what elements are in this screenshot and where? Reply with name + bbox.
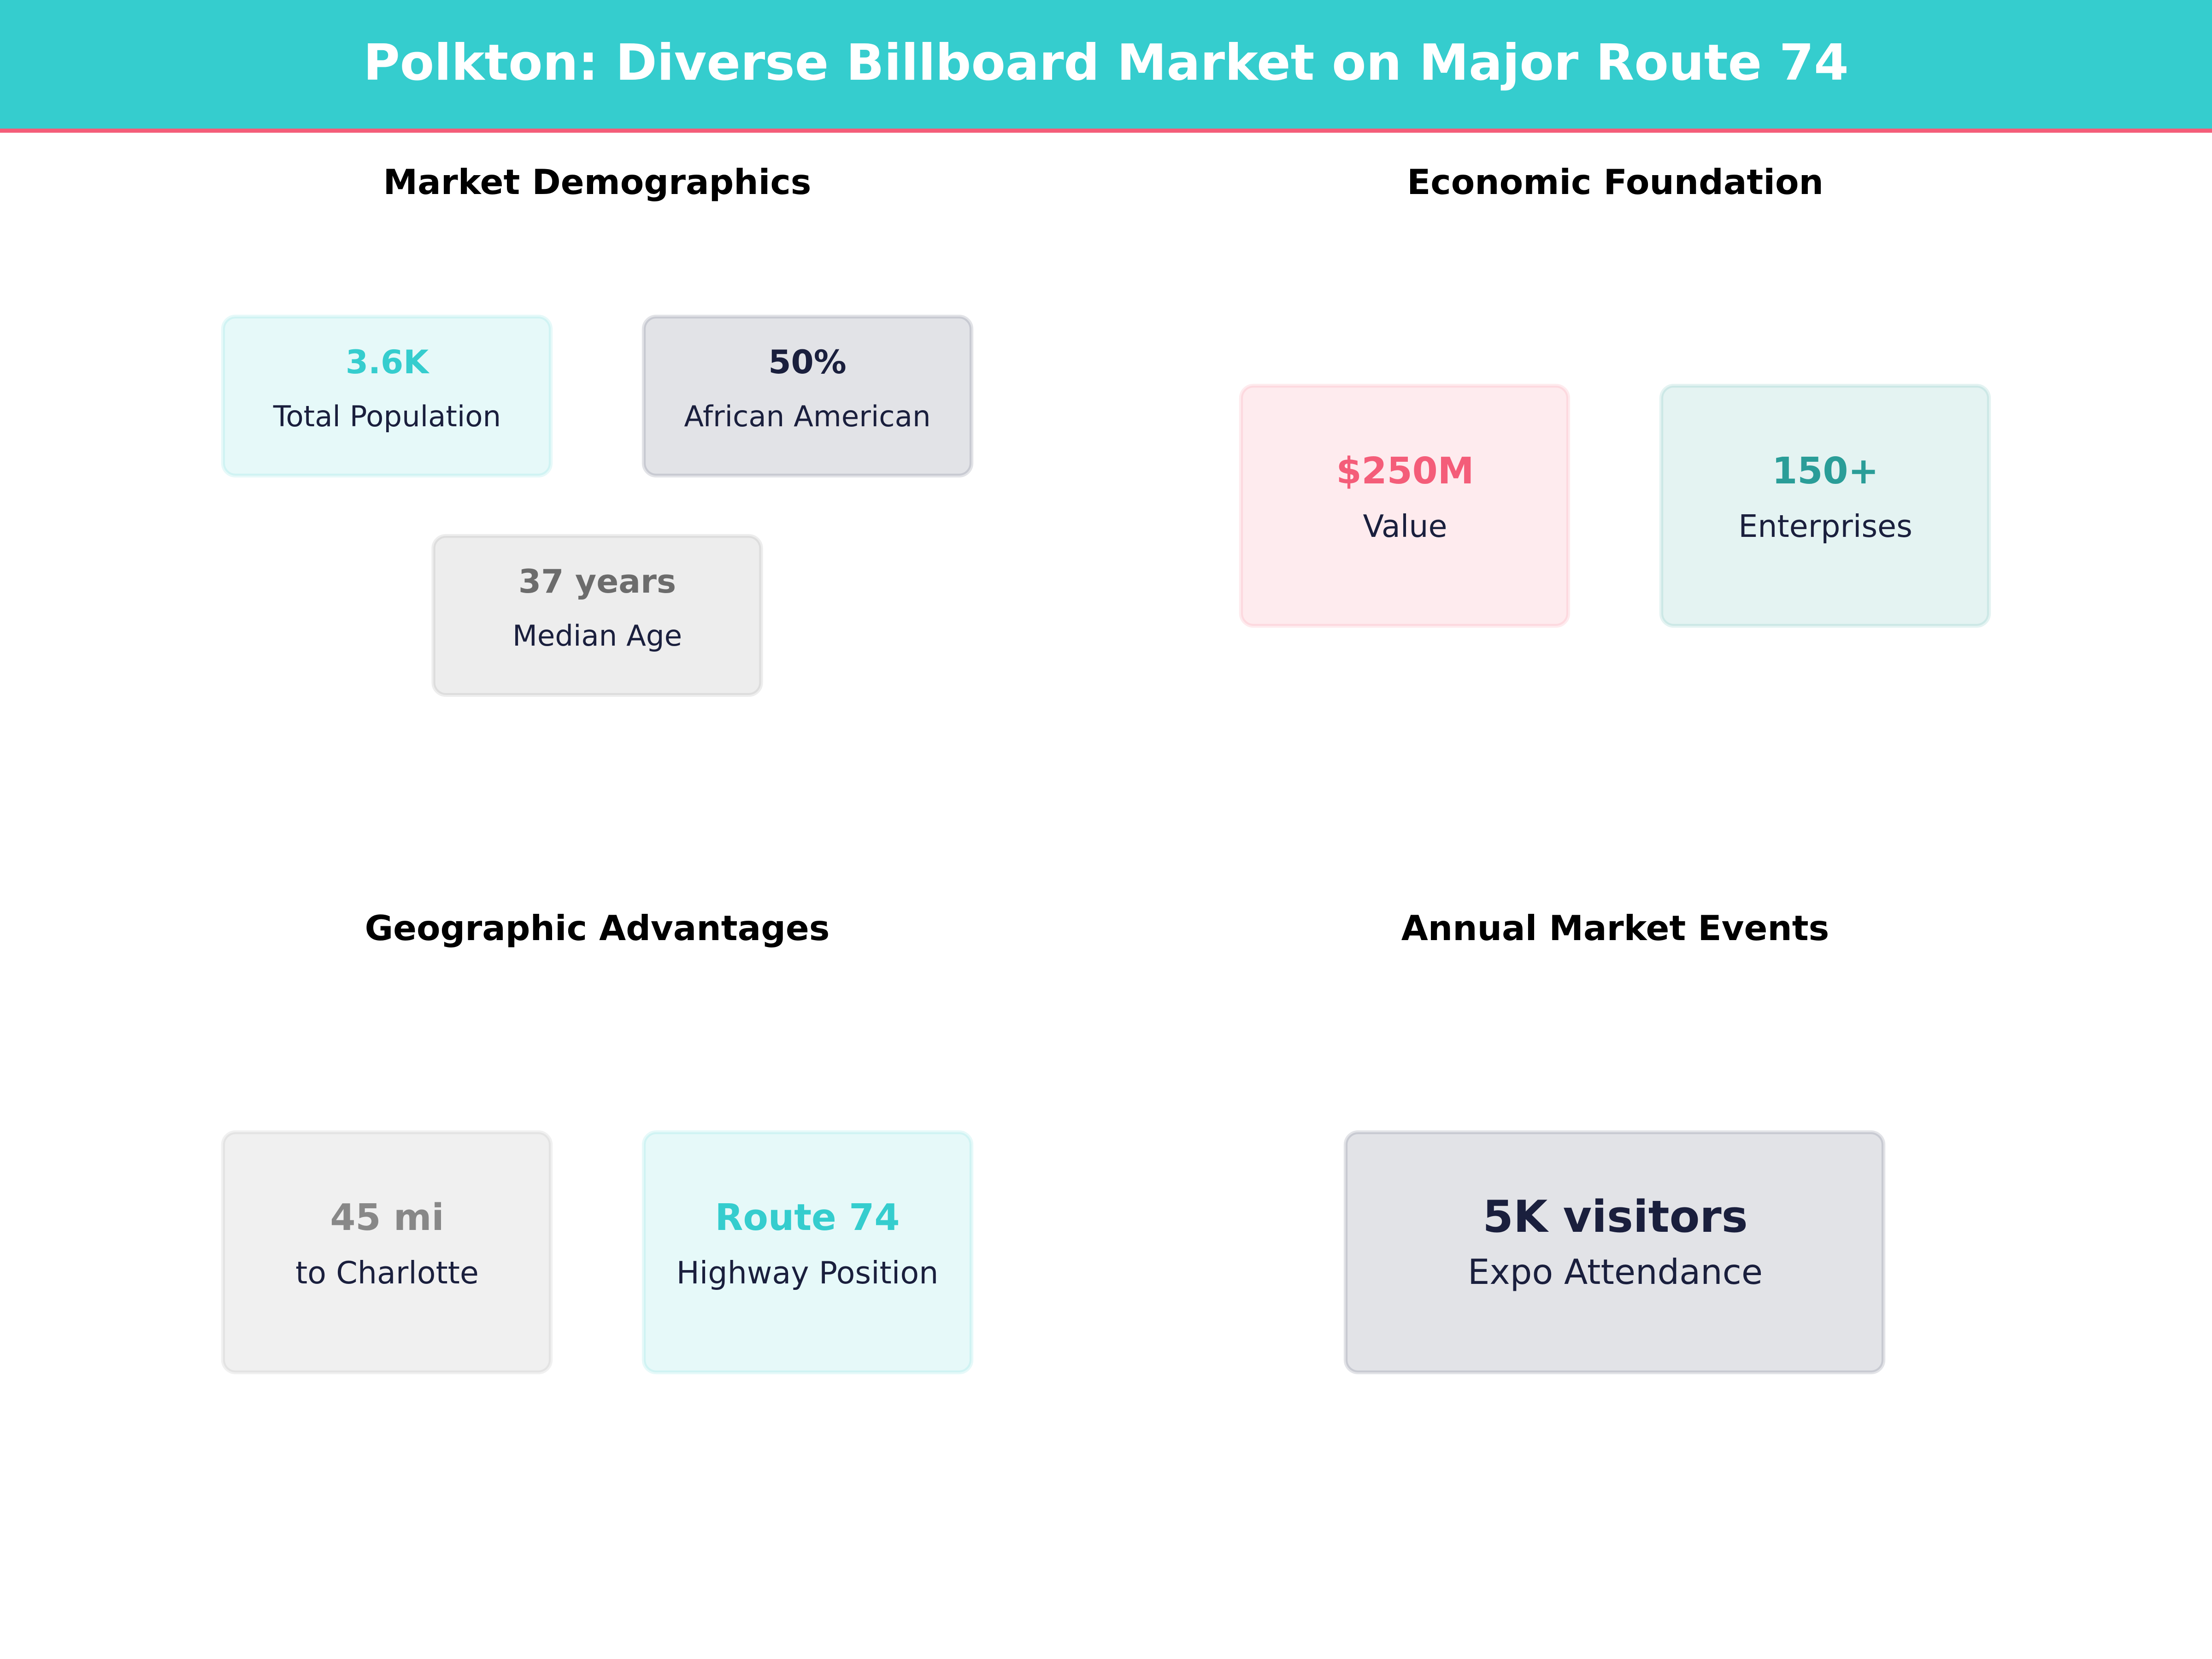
panel: geographic advantages	[223, 908, 971, 1372]
panel: economic foundation	[1241, 162, 1989, 626]
card: enterprises	[1661, 386, 1989, 626]
heading: annual market events: Annual Market Events	[1401, 908, 1829, 948]
heading: geographic advantages: Geographic Advantages	[365, 908, 830, 948]
card: distance to Charlotte	[223, 1132, 551, 1372]
card: total population: 3.6K	[346, 343, 430, 381]
card: African American: African American	[684, 400, 931, 433]
card: value: Value	[1363, 508, 1447, 544]
heading: economic foundation: Economic Foundation	[1407, 162, 1824, 202]
card: median age: 37 years	[518, 562, 676, 600]
header banner	[0, 0, 2212, 133]
card: total population	[223, 317, 551, 476]
card: highway position	[644, 1132, 971, 1372]
card: African American: 50%	[768, 343, 847, 381]
card: distance to Charlotte: 45 mi	[330, 1196, 444, 1239]
card: enterprises: 150+	[1772, 450, 1879, 492]
panel: annual market events	[1346, 908, 1883, 1372]
card: value: $250M	[1336, 450, 1474, 492]
card: highway position: Highway Position	[677, 1255, 938, 1291]
card: expo attendance: Expo Attendance	[1468, 1252, 1763, 1292]
card: distance to Charlotte: to Charlotte	[295, 1255, 479, 1291]
card: highway position: Route 74	[715, 1196, 900, 1239]
card: total population: Total Population	[273, 400, 501, 433]
card: median age: Median Age	[512, 619, 682, 653]
card: African American	[644, 317, 971, 476]
card: expo attendance	[1346, 1132, 1883, 1372]
title: Polkton: Diverse Billboard Market on Major Route 74	[363, 33, 1849, 92]
heading: market demographics: Market Demographics	[383, 162, 811, 202]
card: enterprises: Enterprises	[1738, 508, 1912, 544]
card: value	[1241, 386, 1568, 626]
panel: market demographics	[223, 162, 971, 695]
card: median age	[433, 536, 761, 695]
card: expo attendance: 5K visitors	[1483, 1191, 1748, 1242]
